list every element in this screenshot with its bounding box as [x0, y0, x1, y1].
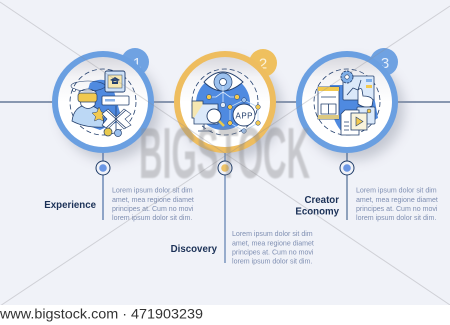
- description 3: Lorem ipsum dolor sit dim: [356, 188, 437, 194]
- label: Experience: Experience: [44, 200, 97, 211]
- footer credit: www.bigstock.com · 471903239: [0, 306, 203, 322]
- description 3: principes at. Cum no movi: [356, 206, 438, 213]
- label: Discovery: Discovery: [171, 244, 218, 255]
- description 1: lorem ipsum dolor sit dim.: [112, 215, 192, 222]
- description 3: amet, mea regione diamet: [356, 197, 438, 204]
- icon: creator tools: [314, 69, 380, 135]
- number badge 1: 1: [133, 55, 141, 72]
- icon: eye, search and app network: APP: [236, 112, 252, 120]
- description 2: Lorem ipsum dolor sit dim: [232, 231, 313, 238]
- ring 3: [296, 51, 398, 153]
- number badge 3: 3: [381, 55, 389, 72]
- icon: eye, search and app network: [192, 69, 260, 135]
- label: Creator Economy: Economy: [295, 206, 340, 218]
- step 3: Creator Economy: [295, 48, 438, 222]
- number badge 1: [121, 48, 149, 76]
- step 1: Experience: [44, 48, 194, 222]
- circle shadow 1: [60, 60, 160, 160]
- connector and node 3: [340, 153, 354, 220]
- timeline axis: [0, 101, 450, 103]
- number badge 3: [370, 48, 398, 76]
- description 2: principes at. Cum no movi: [232, 250, 314, 256]
- connector and node 1: [96, 153, 110, 220]
- icon: VR learner and network: [70, 69, 136, 136]
- description 3: lorem ipsum dolor sit dim.: [356, 215, 436, 222]
- circle shadow 2: [182, 60, 282, 160]
- step 2: Discovery: [171, 49, 314, 266]
- description 2: amet, mea regione diamet: [232, 240, 314, 247]
- description 1: amet, mea regione diamet: [112, 197, 194, 204]
- description 2: lorem ipsum dolor sit dim.: [232, 258, 312, 266]
- description 1: Lorem ipsum dolor sit dim: [112, 188, 193, 194]
- description 1: principes at. Cum no movi: [112, 206, 194, 213]
- number badge 2: 2: [259, 56, 267, 72]
- ring 2: [174, 51, 276, 153]
- label: Creator Economy: Creator: [305, 195, 339, 206]
- footer strip: [0, 305, 450, 325]
- number badge 2: [249, 49, 277, 77]
- ring 1: [52, 51, 154, 153]
- connector and node 2: [218, 153, 232, 263]
- circle shadow 3: [304, 60, 404, 160]
